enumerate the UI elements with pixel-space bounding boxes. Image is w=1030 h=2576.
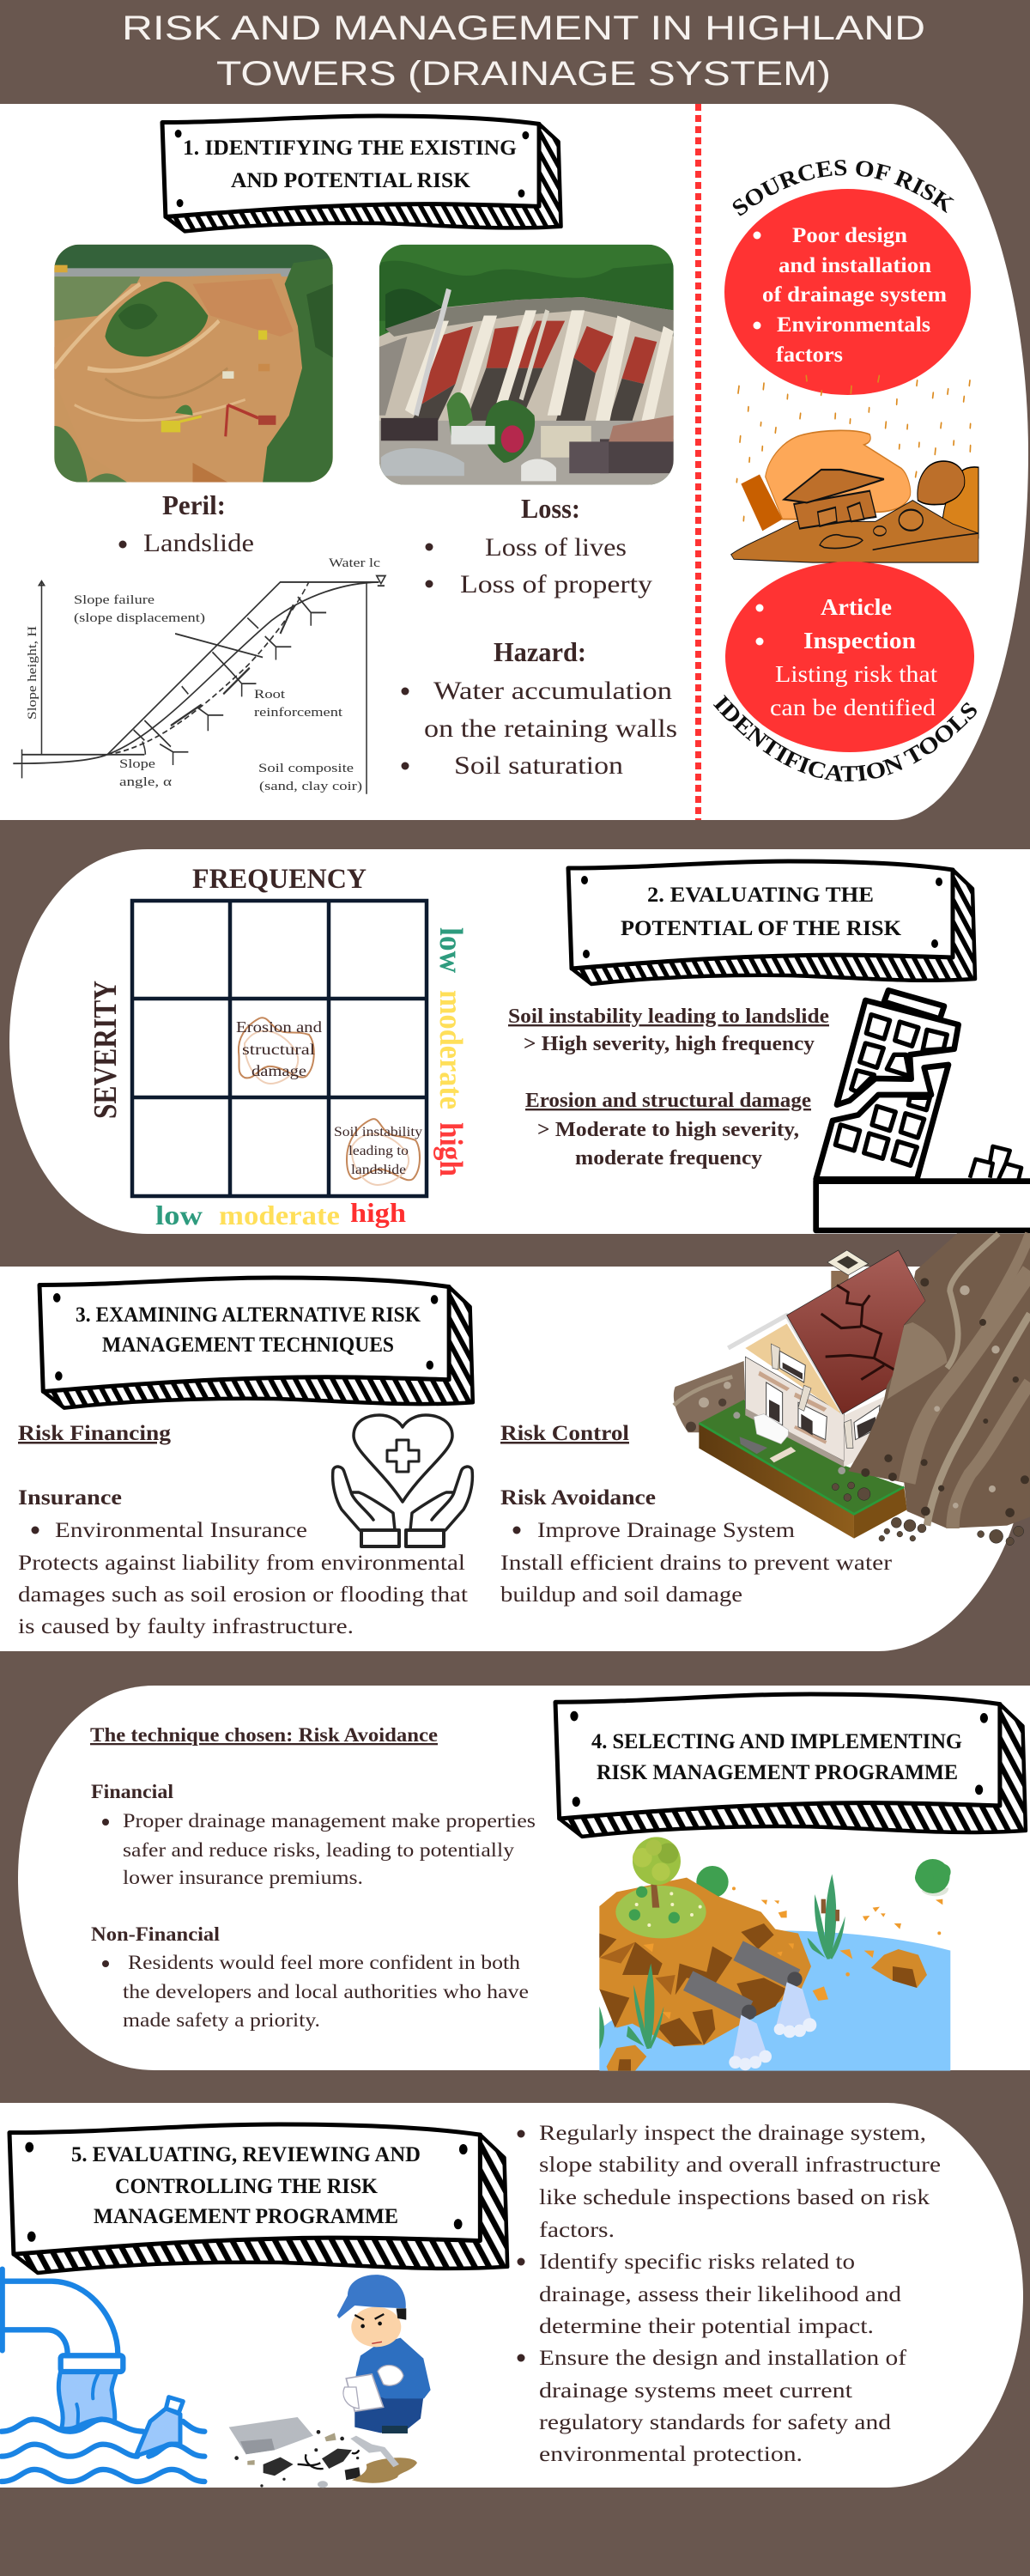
text: chosen technique: Non-Financial	[91, 1923, 220, 1945]
frequency scale labels: high	[350, 1197, 406, 1228]
callout: identification tools	[725, 562, 974, 752]
callout: sources of risk: factors	[776, 343, 843, 367]
photo: landslide site	[54, 245, 333, 483]
matrix item: erosion and structural damage: damage	[251, 1062, 306, 1079]
banner: step 1 heading: 1. IDENTIFYING THE EXISTING	[183, 137, 517, 160]
diagram: slope failure cross-section: Root	[254, 688, 286, 702]
illustration: worker inspecting debris	[229, 2275, 431, 2488]
panel: step 5 evaluating and controlling	[0, 2103, 1023, 2488]
text: loss and hazard: Hazard:	[494, 636, 586, 667]
diagram: slope failure cross-section: Water lc	[329, 556, 380, 570]
banner: step 5 heading: CONTROLLING THE RISK	[115, 2175, 379, 2198]
text: loss and hazard: Water accumulation	[433, 677, 672, 705]
text: review actions: drainage, assess their likelihood and	[539, 2283, 902, 2306]
text: risk financing: is caused by faulty infrastructure.	[18, 1615, 354, 1638]
text: risk evaluation: moderate frequency	[575, 1147, 762, 1170]
text: review actions: drainage systems meet current	[539, 2379, 852, 2403]
severity scale labels	[433, 927, 469, 1176]
text: risk financing	[18, 1422, 468, 1638]
illustration: hand shielding house from landslide	[731, 376, 978, 562]
diagram: slope failure cross-section: reinforcement	[254, 706, 343, 720]
text: peril	[118, 489, 254, 557]
arc heading: identification tools: IDENTIFICATION TOOLS	[712, 695, 977, 781]
banner: step 4 heading: 4. SELECTING AND IMPLEMENTING	[591, 1730, 962, 1753]
banner: step 3 heading: MANAGEMENT TECHNIQUES	[102, 1334, 394, 1357]
diagram: slope failure cross-section: (slope displacement)	[74, 611, 205, 625]
banner: step 2 heading: POTENTIAL OF THE RISK	[621, 917, 902, 940]
frequency scale labels: low	[155, 1200, 203, 1230]
text: loss and hazard: Loss of property	[460, 570, 652, 598]
text: risk evaluation: Soil instability leading to landslide	[508, 1005, 829, 1028]
text: risk financing: Protects against liability from environmental	[18, 1552, 465, 1575]
text: review actions: Identify specific risks related to	[539, 2251, 855, 2274]
diagram: slope failure cross-section: angle, α	[119, 775, 172, 789]
text: risk financing: Insurance	[18, 1486, 122, 1510]
frequency scale labels	[155, 1197, 406, 1230]
text: review actions: Ensure the design and installation of	[539, 2347, 907, 2370]
title	[122, 9, 925, 93]
text: review actions: determine their potential impact.	[539, 2315, 874, 2338]
banner: step 1 heading: AND POTENTIAL RISK	[231, 169, 471, 192]
diagram: slope failure cross-section: (sand, clay coir)	[259, 780, 362, 793]
text: risk evaluation: Erosion and structural damage	[525, 1090, 811, 1112]
text: review actions	[517, 2122, 941, 2466]
text: chosen technique: lower insurance premiums.	[123, 1867, 363, 1888]
text: loss and hazard: Loss:	[521, 493, 580, 524]
text: review actions: like schedule inspections based on risk	[539, 2186, 930, 2209]
text: chosen technique: The technique chosen: Risk Avoidance	[90, 1724, 438, 1746]
text: risk control: Risk Avoidance	[500, 1486, 656, 1510]
panel: step 4 selecting and implementing	[18, 1686, 1030, 2071]
text: review actions: regulatory standards for safety and	[539, 2411, 892, 2434]
banner: step 3 heading	[39, 1278, 473, 1408]
matrix item: soil instability leading to landslide	[334, 1119, 422, 1185]
matrix item: erosion and structural damage	[236, 1018, 322, 1084]
title: RISK AND MANAGEMENT IN HIGHLAND	[122, 9, 925, 47]
text: chosen technique	[90, 1724, 536, 2031]
text: risk evaluation: > Moderate to high severity,	[537, 1119, 799, 1141]
banner: step 5 heading	[9, 2124, 507, 2273]
callout: sources of risk: Environmentals	[777, 313, 930, 337]
text: risk evaluation	[508, 1005, 829, 1170]
text: chosen technique: Residents would feel more confident in both	[128, 1952, 521, 1973]
illustration: drainage pipes on eroded bank	[599, 1837, 951, 2071]
banner: step 1 heading	[162, 116, 561, 231]
frequency scale labels: moderate	[219, 1200, 340, 1230]
text: risk control: Improve Drainage System	[537, 1519, 796, 1542]
banner: step 4 heading	[555, 1694, 1026, 1837]
axis label: severity: SEVERITY	[88, 981, 124, 1119]
callout: identification tools: can be dentified	[770, 695, 936, 720]
text: loss and hazard: Loss of lives	[485, 533, 627, 562]
callout: sources of risk: and installation	[779, 254, 931, 277]
icon: collapsing building	[816, 990, 1030, 1230]
callout: sources of risk	[724, 189, 971, 395]
panel: step 1 identifying risk	[0, 104, 1028, 820]
callout: identification tools: Article	[821, 594, 892, 620]
divider: red dashed line	[695, 104, 701, 820]
text: loss and hazard	[402, 493, 677, 780]
panel: step 2 evaluating risk	[9, 849, 1030, 1234]
arc heading: sources of risk: SOURCES OF RISK	[733, 160, 954, 216]
text: peril: Peril:	[162, 489, 226, 520]
banner: step 5 heading: 5. EVALUATING, REVIEWING AND	[71, 2143, 421, 2166]
matrix item: erosion and structural damage: structural	[242, 1041, 315, 1058]
callout: identification tools: Listing risk that	[775, 661, 938, 687]
diagram: slope failure cross-section: Soil composite	[258, 762, 354, 775]
text: chosen technique: Proper drainage management make properties	[123, 1810, 536, 1832]
banner: step 5 heading: MANAGEMENT PROGRAMME	[94, 2205, 398, 2228]
icon: hands holding heart	[333, 1415, 472, 1546]
diagram: slope failure cross-section	[13, 556, 385, 794]
text: review actions: environmental protection.	[539, 2443, 803, 2466]
text: loss and hazard: on the retaining walls	[424, 714, 677, 743]
text: chosen technique: made safety a priority.	[123, 2009, 320, 2031]
severity scale labels: high	[433, 1122, 469, 1176]
axis label: frequency: FREQUENCY	[192, 864, 367, 895]
banner: step 3 heading: 3. EXAMINING ALTERNATIVE RISK	[76, 1303, 421, 1327]
banner: step 2 heading	[568, 861, 975, 984]
text: risk control: Risk Control	[500, 1422, 629, 1445]
text: review actions: Regularly inspect the drainage system,	[539, 2122, 926, 2145]
diagram: slope failure cross-section: Slope	[119, 757, 155, 771]
title: TOWERS (DRAINAGE SYSTEM)	[216, 55, 831, 93]
banner: step 2 heading: 2. EVALUATING THE	[647, 884, 874, 907]
text: loss and hazard: Soil saturation	[454, 751, 623, 780]
callout: sources of risk: Poor design	[792, 224, 907, 247]
text: review actions: slope stability and overall infrastructure	[539, 2154, 941, 2177]
matrix item: soil instability leading to landslide: landslide	[351, 1163, 406, 1177]
text: risk financing: damages such as soil erosion or flooding that	[18, 1583, 468, 1607]
severity scale labels: low	[433, 927, 469, 974]
callout: identification tools: Inspection	[803, 628, 916, 653]
risk matrix grid	[132, 901, 427, 1196]
matrix item: soil instability leading to landslide: leading to	[348, 1144, 409, 1158]
panel: step 3 examining techniques	[0, 1267, 1026, 1651]
text: chosen technique: safer and reduce risks, leading to potentially	[123, 1839, 515, 1861]
text: risk control: Install efficient drains to prevent water	[500, 1552, 893, 1575]
banner: step 4 heading: RISK MANAGEMENT PROGRAMME	[597, 1761, 958, 1784]
icon: drainage pipe polluting water	[2, 2269, 204, 2482]
illustration: house hit by landslide	[674, 1234, 1030, 1546]
text: risk control: buildup and soil damage	[500, 1583, 742, 1607]
text: risk financing: Environmental Insurance	[55, 1519, 307, 1542]
text: chosen technique: the developers and local authorities who have	[123, 1981, 529, 2002]
severity scale labels: moderate	[433, 990, 469, 1109]
text: risk control	[500, 1422, 893, 1607]
callout: sources of risk: of drainage system	[762, 283, 947, 307]
photo: collapsed Highland Towers	[379, 245, 674, 485]
diagram: slope failure cross-section: Slope failure	[74, 593, 154, 607]
text: review actions: factors.	[539, 2219, 615, 2242]
text: peril: Landslide	[143, 529, 254, 557]
text: risk financing: Risk Financing	[18, 1422, 172, 1445]
matrix item: soil instability leading to landslide: Soil instability	[334, 1125, 422, 1139]
text: chosen technique: Financial	[91, 1781, 173, 1802]
text: risk evaluation: > High severity, high frequency	[524, 1033, 815, 1055]
diagram: slope failure cross-section: Slope height, H	[26, 626, 39, 720]
matrix item: erosion and structural damage: Erosion and	[236, 1018, 322, 1036]
